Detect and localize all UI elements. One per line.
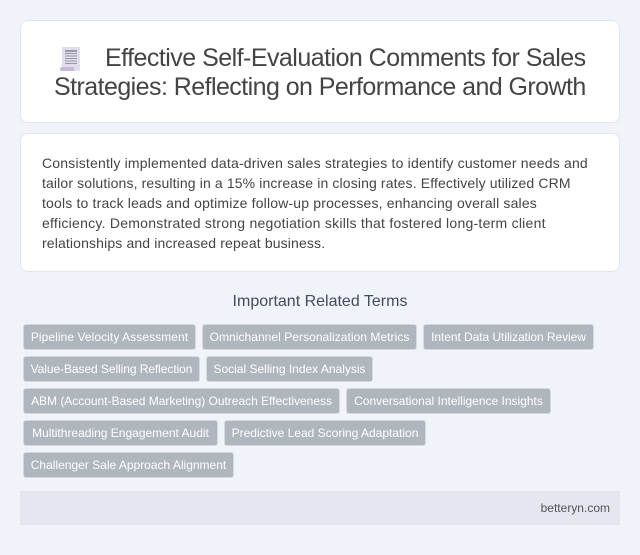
summary text: tools to track leads and optimize follow-up processes, enhancing overall sales bbox=[42, 195, 537, 211]
title panel bbox=[20, 20, 620, 123]
tag: Multithreading Engagement Audit bbox=[32, 426, 209, 440]
tag: Social Selling Index Analysis bbox=[213, 362, 366, 376]
summary text: efficiency. Demonstrated strong negotiation skills that fostered long-term client bbox=[42, 215, 546, 231]
summary panel bbox=[20, 133, 620, 272]
summary text bbox=[42, 155, 588, 251]
icon: document scroll bbox=[60, 47, 80, 71]
footer bar bbox=[20, 491, 620, 525]
tag bbox=[206, 356, 373, 382]
tag bbox=[23, 324, 196, 350]
tag bbox=[23, 452, 234, 478]
title: Effective Self-Evaluation Comments for Sales bbox=[105, 44, 586, 72]
related terms heading: Important Related Terms bbox=[233, 293, 407, 310]
tag: ABM (Account-Based Marketing) Outreach Effectiveness bbox=[31, 394, 332, 408]
tag bbox=[202, 324, 417, 350]
summary text: Consistently implemented data-driven sales strategies to identify customer needs and bbox=[42, 155, 588, 171]
summary text: tailor solutions, resulting in a 15% increase in closing rates. Effectively utilized CRM bbox=[42, 175, 571, 191]
tag bbox=[23, 356, 200, 382]
tag: Challenger Sale Approach Alignment bbox=[31, 458, 226, 472]
tag: Intent Data Utilization Review bbox=[431, 330, 586, 344]
tag bbox=[224, 420, 426, 446]
summary text: relationships and increased repeat business. bbox=[42, 235, 325, 251]
title: Strategies: Reflecting on Performance and Growth bbox=[54, 73, 586, 101]
tag: Value-Based Selling Reflection bbox=[31, 362, 192, 376]
tag bbox=[23, 420, 218, 446]
title bbox=[54, 44, 586, 101]
related terms tags bbox=[23, 324, 594, 478]
tag bbox=[423, 324, 594, 350]
tag bbox=[23, 388, 340, 414]
tag bbox=[346, 388, 551, 414]
footer source text: betteryn.com bbox=[541, 501, 610, 515]
tag: Conversational Intelligence Insights bbox=[354, 394, 543, 408]
tag: Pipeline Velocity Assessment bbox=[31, 330, 188, 344]
tag: Predictive Lead Scoring Adaptation bbox=[232, 426, 418, 440]
tag: Omnichannel Personalization Metrics bbox=[210, 330, 409, 344]
